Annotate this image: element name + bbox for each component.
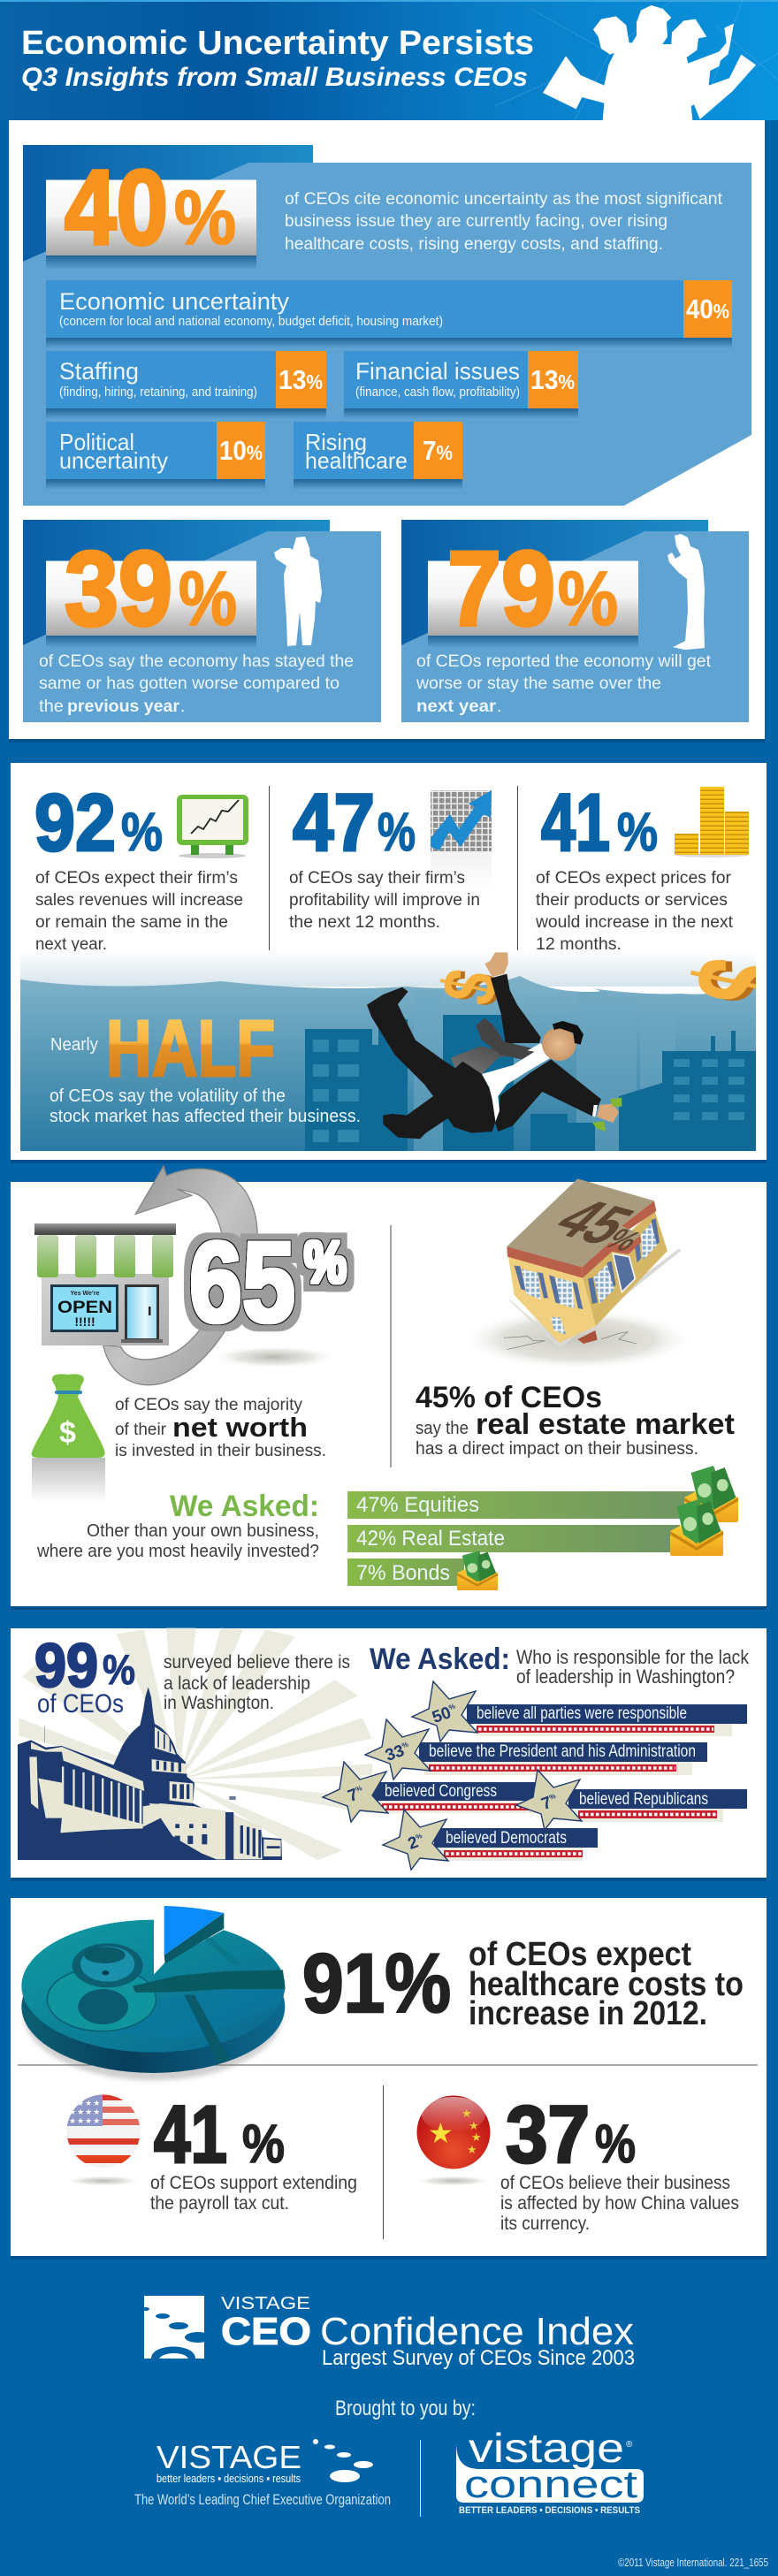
text block: net worth [115,1395,326,1460]
text: half: HALF [106,1005,275,1094]
text block: China currency: is affected by how China values [500,2193,739,2214]
banner: republicans 7%: believed Republicans [579,1790,708,1809]
bar: economic uncertainty 40%: 40% [686,293,729,324]
stat: 79 percent [447,530,618,648]
text block: stock market volatility [50,1086,361,1126]
text block: net worth: net worth [172,1412,308,1443]
text block: prices: 12 months. [536,935,622,954]
bar: staffing 13%: (finding, hiring, retaining, and training) [59,385,257,400]
logo: Vistage [134,2439,391,2508]
bar: real estate 42%: 42% Real Estate [356,1527,505,1551]
icon: US flag globe: ★★★★ [69,2099,101,2107]
icon: CEO silhouettes [543,5,756,120]
text block: 79 percent description: worse or stay the same over the [416,674,661,693]
bar: political uncertainty 10%: 10% [219,435,263,466]
text block: real estate market: has a direct impact on their business. [416,1439,698,1459]
banner: democrats 2%: 2 [406,1833,421,1854]
bar: economic uncertainty 40% [46,280,732,348]
stat: 41 percent expect price increase: 41 [541,778,610,868]
text block: stock market volatility: of CEOs say the volatility of the [50,1086,286,1106]
icon: falling businessman [367,952,622,1139]
logo: Vistage: better leaders ▪ decisions ▪ results [156,2472,301,2485]
text block: 39 percent description [39,652,354,716]
text block: sales revenues: sales revenues will increase [35,891,243,910]
text block: payroll tax: the payroll tax cut. [150,2193,289,2214]
text block: net worth: of their [115,1420,166,1439]
logo: Vistage: VISTAGE [156,2439,301,2475]
text block: China currency: of CEOs believe their business [500,2173,730,2193]
bar: rising healthcare 7% [294,422,462,490]
banner: democrats 2%: % [415,1832,423,1841]
icon: gold dollar sign left: $ [426,963,515,1011]
banner: republicans 7%: 7 [539,1794,554,1814]
logo: Vistage Connect: connect [464,2463,637,2506]
bar: staffing 13% [46,351,326,419]
bar: rising healthcare 7%: Rising [305,429,367,455]
bar: equities 47%: 47% Equities [356,1493,479,1517]
text block: profitability [289,869,480,932]
text block: prices [535,869,734,954]
text block: prices: of CEOs expect prices for [536,869,732,888]
icon: open storefront [34,1223,176,1345]
icon: China flag globe: ★ [469,2119,479,2132]
stat: 41 percent payroll: 41 [154,2090,227,2180]
text block: sales revenues: of CEOs expect their firm’s [35,869,238,888]
logo: Vistage CEO Confidence Index: Largest Survey of CEOs Since 2003 [322,2346,635,2370]
illustration: sunburst rays [19,1628,372,1860]
icon: open storefront: OPEN [57,1299,112,1317]
text block: investment question [36,1521,319,1561]
panel: leadership in Washington [11,1628,767,1881]
stat: 40 percent: % [174,176,236,261]
banner: congress 7%: believed Congress [385,1782,497,1801]
logo: Vistage CEO Confidence Index [142,2294,635,2370]
icon: green chart monitor [177,795,248,858]
bar: equities 47% [347,1466,738,1522]
text block: who is responsible: of leadership in Washington? [516,1665,735,1688]
text block: 40 percent description: of CEOs cite economic uncertainty as the most significant [285,189,723,209]
stat: 37 percent: % [595,2114,636,2174]
icon: green money bag: $ [59,1416,76,1450]
bar: economic uncertainty 40%: (concern for local and national economy, budget deficit, housing market) [59,315,443,329]
text block: sales revenues: or remain the same in the [35,913,228,932]
bar: financial issues 13%: (finance, cash flow, profitability) [355,385,520,400]
chart: 3D teal pie with stethoscope [21,1906,286,2080]
text block: real estate market: 45% of CEOs [416,1381,602,1414]
stat: 79 percent: 79 [447,530,555,648]
logo: Vistage Connect: vistage [469,2425,624,2471]
icon: tilted sinking house with 45% roof [460,1178,696,1370]
logo: Vistage CEO Confidence Index: Confidence Index [320,2310,634,2353]
text block: net worth: is invested in their business. [115,1441,326,1460]
text block: 40 percent description [285,189,723,254]
logo: Vistage Connect [456,2425,644,2516]
bar: financial issues 13%: Financial issues [355,358,520,385]
banner: democrats 2%: believed Democrats [446,1829,567,1848]
bar: financial issues 13%: 13% [530,364,575,395]
panel: 39 percent tile [23,520,381,722]
text block: 39 percent description: the [39,697,64,716]
stat: 41 percent payroll [154,2090,285,2180]
bar: rising healthcare 7%: healthcare [305,447,408,474]
text block: 39 percent description: . [180,697,185,716]
stat: 47 percent: 47 [293,778,375,868]
stat: 92 percent: % [121,802,163,862]
text block: sales revenues: next year. [35,935,107,954]
title: Economic Uncertainty Persists [21,25,534,62]
stat: 47 percent: % [378,802,416,862]
banner: congress 7%: 7 [346,1786,361,1806]
icon: open storefront: !!!!! [74,1315,95,1329]
text block: 79 percent description: next year [416,697,497,716]
text block: profitability: profitability will improve in [289,891,480,910]
text block: stock market volatility: stock market has affected their business. [50,1107,361,1126]
icon: rising arrow on grid [431,790,492,891]
text block: 40 percent description: healthcare costs, rising energy costs, and staffing. [285,234,663,254]
bar: rising healthcare 7%: 7% [423,435,453,466]
text block: lack of leadership: surveyed believe there is [164,1652,350,1673]
text block: net worth: of CEOs say the majority [115,1395,302,1414]
text: brought to you by: Brought to you by: [335,2397,476,2420]
logo: Vistage Connect: ® [626,2440,633,2450]
logo: Vistage CEO Confidence Index: CEO [221,2310,311,2353]
text block: lack of leadership [164,1652,350,1713]
logo: Vistage CEO Confidence Index: VISTAGE [221,2294,310,2313]
text block: healthcare costs: of CEOs expect [469,1936,691,1973]
heading: we asked green: We Asked: [170,1490,319,1523]
text block: who is responsible: Who is responsible for the lack [516,1646,750,1668]
banner: congress 7% [323,1762,538,1822]
banner: president 33%: 33 [383,1741,407,1765]
stat: 39 percent [65,530,237,648]
subtitle: Q3 Insights from Small Business CEOs [21,63,528,92]
stat: 39 percent: % [179,557,237,642]
text block: prices: would increase in the next [535,913,734,932]
text block: profitability: of CEOs say their firm’s [289,869,465,888]
bar: bonds 7% [347,1551,498,1590]
icon: US flag globe: ★★★★ [69,2107,101,2116]
stat: 40 percent [65,149,236,267]
icon: man reading silhouette [667,534,705,650]
text block: payroll tax [150,2173,357,2214]
icon: gold coin stacks [675,787,749,857]
panel: expectations and stock market [11,763,778,1163]
icon: man saluting silhouette [274,537,322,646]
stat: 37 percent: 37 [506,2090,590,2180]
bar: financial issues 13% [344,351,578,419]
text block: real estate market: say the [416,1419,469,1438]
bar: bonds 7%: 7% Bonds [356,1561,450,1585]
text block: real estate market: real estate market [476,1407,735,1440]
stat: 65 percent outlined: % [304,1229,347,1296]
stat: 99 percent: 99 [34,1631,98,1700]
banner: democrats 2% [383,1810,598,1870]
text block: 39 percent description: of CEOs say the economy has stayed the [39,652,354,671]
panel: 40 percent block [23,145,751,506]
icon: China flag globe [415,2095,492,2186]
illustration: capitol building [18,1687,282,1860]
text: nearly: Nearly [50,1035,98,1055]
bar: political uncertainty 10% [46,422,265,490]
banner: all parties 50% [412,1681,747,1741]
panel: economic issues [9,120,765,743]
text block: 79 percent description: . [497,697,501,716]
stat: 41 percent payroll: % [242,2114,285,2174]
banner: all parties 50%: believe all parties were responsible [477,1704,687,1723]
icon: tilted sinking house with 45% roof: 45% [539,1187,671,1262]
bar: staffing 13%: 13% [278,364,323,395]
text block: 79 percent description [416,652,712,716]
banner: president 33%: % [400,1741,409,1749]
text block: prices: their products or services [536,891,728,910]
text block: 40 percent description: business issue they are currently facing, over rising [285,211,667,231]
text block: healthcare costs [469,1936,744,2032]
text block: payroll tax: of CEOs support extending [150,2173,357,2193]
banner: president 33% [365,1719,707,1780]
stat: 65 percent outlined: 65 [189,1217,295,1346]
stat: 91 percent: 91% [302,1937,451,2031]
footer [134,2294,768,2569]
text block: China currency [500,2173,739,2234]
bar: political uncertainty 10%: uncertainty [59,447,168,474]
banner: all parties 50%: 50 [430,1703,454,1727]
icon: US flag globe [65,2094,142,2186]
text block: healthcare costs: healthcare costs to [469,1966,744,2003]
stat: 39 percent: 39 [65,530,172,648]
bar: real estate 42% [347,1499,723,1556]
header banner [0,0,778,120]
text block: 79 percent description: of CEOs reported the economy will get [416,652,712,671]
stat: 37 percent [506,2090,636,2180]
text block: investment question: where are you most heavily invested? [36,1542,319,1561]
bar: staffing 13%: Staffing [59,358,139,385]
bar: economic uncertainty 40%: Economic uncertainty [59,288,290,315]
stat: 92 percent: 92 [34,778,116,868]
text block: profitability: the next 12 months. [289,913,440,932]
icon: China flag globe: ★ [471,2130,482,2144]
logo: Vistage: The World’s Leading Chief Executive Organization [134,2491,391,2508]
stat: 41 percent expect price increase: % [617,802,658,862]
banner: all parties 50%: % [447,1703,456,1711]
icon: US flag globe: ★★★★ [69,2116,101,2125]
icon: China flag globe: ★ [428,2117,454,2149]
text block: healthcare costs: increase in 2012. [469,1995,707,2032]
panel: 79 percent tile [401,520,749,722]
text block: lack of leadership: in Washington. [164,1693,274,1713]
panel: healthcare and policy [11,1898,767,2260]
icon: China flag globe: ★ [461,2107,472,2120]
icon: green money bag [32,1374,105,1502]
icon: circular grey arrow [103,1166,338,1385]
icon: open storefront: Yes We’re [71,1291,100,1297]
banner: republicans 7%: % [548,1792,557,1802]
banner: congress 7%: % [355,1784,363,1794]
banner: president 33%: believe the President and his Administration [429,1742,696,1761]
stat: 79 percent: % [558,557,618,642]
stat: 40 percent: 40 [65,149,168,267]
text block: who is responsible [516,1646,750,1688]
text block: China currency: its currency. [500,2214,590,2234]
text block: lack of leadership: a lack of leadership [164,1673,310,1694]
stat: 99 percent [34,1631,135,1700]
panel: net worth and real estate [11,1166,767,1610]
heading: we asked navy: We Asked: [370,1642,510,1676]
text block: 39 percent description: previous year [67,697,180,716]
text block: real estate market [416,1381,735,1459]
banner: republicans 7% [516,1770,747,1830]
text block: 39 percent description: same or has gotten worse compared to [39,674,339,693]
text block: sales revenues [35,869,243,954]
icon: China flag globe: ★ [467,2143,477,2156]
logo: Vistage Connect: BETTER LEADERS • DECISIONS • RESULTS [459,2505,640,2516]
stat: 99 percent: % [103,1646,135,1693]
text: of CEOs: of CEOs [37,1689,124,1719]
illustration: falling businessman skyline [20,947,778,1151]
bar: political uncertainty 10%: Political [59,429,134,455]
text block: investment question: Other than your own business, [87,1521,319,1541]
